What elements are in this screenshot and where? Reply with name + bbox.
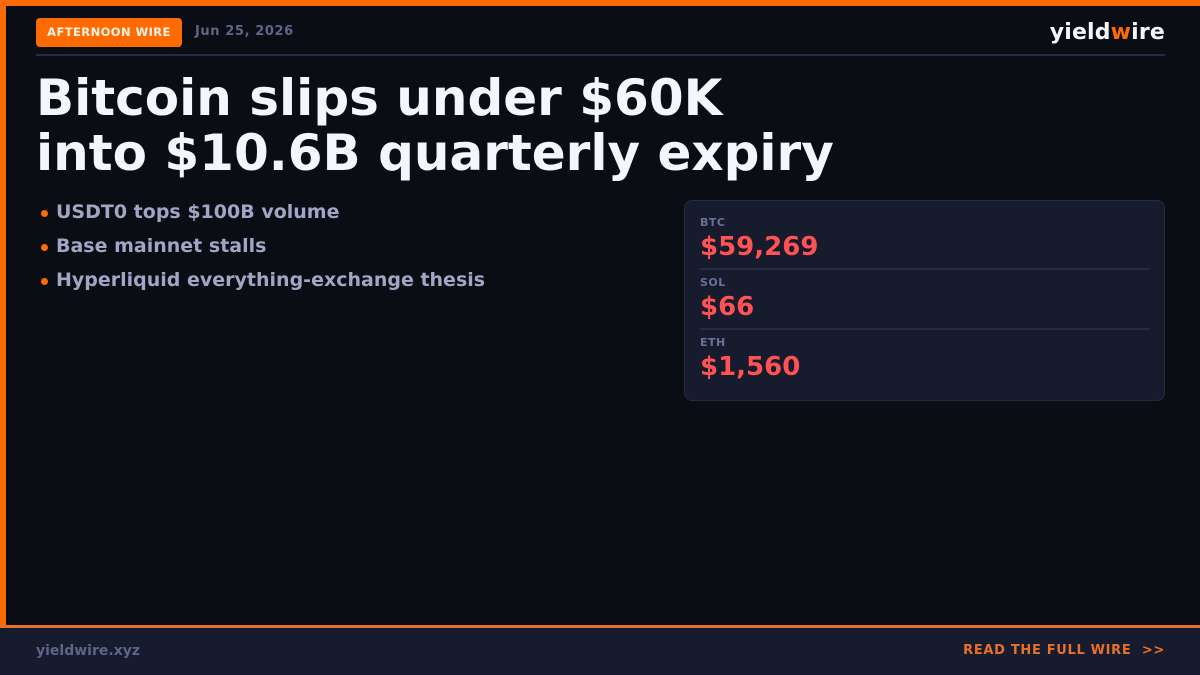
panel: prices: [684, 200, 1165, 401]
header rule: [36, 54, 1165, 56]
bullet 1 marker: [40, 210, 48, 217]
bullet 2 text: Base mainnet stalls: [56, 235, 266, 257]
footer call to action: READ THE FULL WIRE >>: [963, 643, 1165, 658]
label: ETH: ETH: [700, 336, 726, 349]
bullet 2 marker: [40, 244, 48, 251]
bullet list: [41, 201, 485, 291]
badge: afternoon wire: [36, 18, 182, 47]
left accent bar: [0, 0, 6, 628]
badge: afternoon wire: AFTERNOON WIRE: [47, 25, 171, 39]
date: Jun 25, 2026: [195, 24, 294, 39]
top accent bar: [0, 0, 1200, 6]
title: Bitcoin slips under $60K: [36, 69, 722, 127]
value: ETH price: $1,560: [700, 352, 800, 382]
value: BTC price: $59,269: [700, 232, 818, 262]
bullet 3 text: Hyperliquid everything-exchange thesis: [56, 269, 485, 291]
title: into $10.6B quarterly expiry: [36, 124, 834, 182]
bullet 1 text: USDT0 tops $100B volume: [56, 201, 339, 223]
title: [36, 69, 834, 182]
brand logo: yieldwire: [1050, 20, 1165, 45]
footer site url: yieldwire.xyz: [36, 643, 140, 659]
footer: [0, 625, 1200, 675]
label: BTC: BTC: [700, 216, 725, 229]
label: SOL: SOL: [700, 276, 726, 289]
value: SOL price: $66: [700, 292, 754, 322]
bullet 3 marker: [40, 278, 48, 285]
